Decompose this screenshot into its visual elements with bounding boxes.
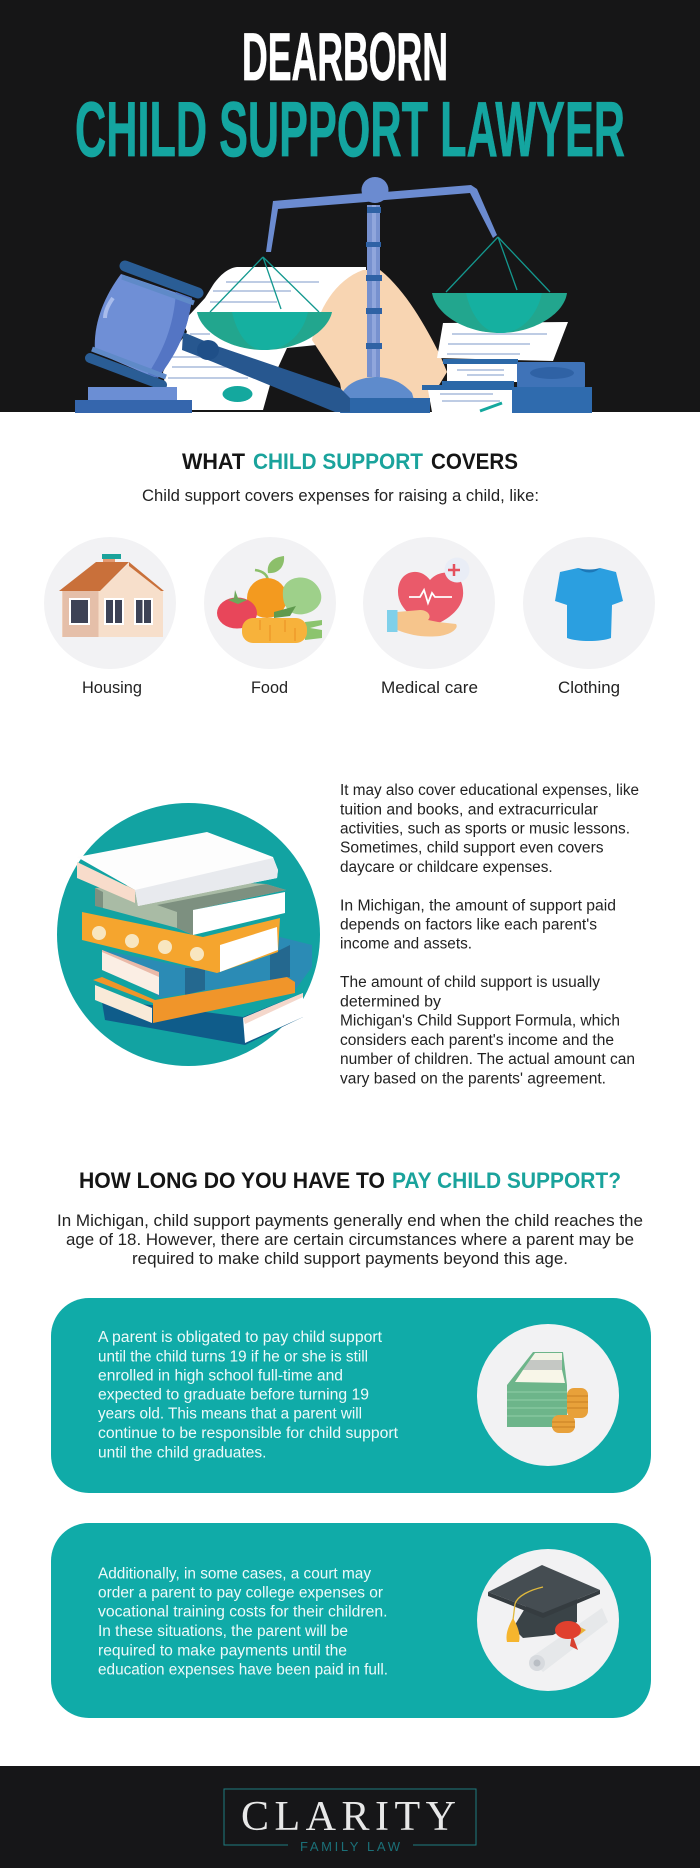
item: clothing: [523, 537, 655, 697]
panel: college card: [51, 1523, 651, 1718]
heading: what child support covers: [182, 449, 518, 474]
bottom navy book: [102, 993, 303, 1045]
label: housing: Housing: [82, 679, 142, 697]
text: college: In these situations, the parent will be: [98, 1623, 348, 1640]
sage book: [95, 880, 286, 935]
orange lying book: [93, 977, 295, 1023]
text: how long intro: [57, 1212, 643, 1268]
heading: how long: HOW LONG DO YOU HAVE TO: [79, 1168, 385, 1193]
text: education paragraph: Sometimes, child support even covers: [340, 840, 604, 857]
panel: header: [0, 0, 700, 413]
text: high school: A parent is obligated to pay child support: [98, 1329, 383, 1346]
text: high school: years old. This means that a parent will: [98, 1406, 362, 1423]
heading: what child support covers: WHAT: [182, 449, 246, 474]
text: high school: expected to graduate before turning 19: [98, 1387, 369, 1404]
text: formula paragraph: determined by: [340, 993, 441, 1010]
text: Michigan paragraph: depends on factors like each parent's: [340, 916, 597, 933]
text: Michigan paragraph: In Michigan, the amount of support paid: [340, 897, 616, 914]
illustration: stack of books: [57, 803, 320, 1066]
text: education paragraph: tuition and books, and extracurricular: [340, 801, 598, 818]
text: Michigan paragraph: income and assets.: [340, 936, 472, 953]
text: college: required to make payments until the: [98, 1642, 347, 1659]
heading: how long: [79, 1168, 621, 1193]
text: formula paragraph: considers each parent's income and the: [340, 1032, 614, 1049]
panel: high school card: [51, 1298, 651, 1493]
text: Michigan paragraph: [340, 897, 616, 953]
top white book: [77, 832, 278, 906]
text: college: [98, 1565, 388, 1678]
text: high school: until the child graduates.: [98, 1444, 266, 1461]
text: high school: enrolled in high school full-time and: [98, 1367, 343, 1384]
title: Dearborn: DEARBORN: [242, 19, 448, 95]
icon: heart in hand: [387, 558, 470, 637]
label: food: Food: [251, 679, 288, 697]
item: housing: [44, 537, 176, 697]
text: how long intro: required to make child support payments beyond this age.: [132, 1250, 568, 1268]
text: how long intro: In Michigan, child support payments generally end when the child reaches the: [57, 1212, 643, 1230]
label: clothing: Clothing: [558, 679, 620, 697]
text: formula paragraph: Michigan's Child Support Formula, which: [340, 1012, 620, 1029]
icon: money and coins: [507, 1352, 588, 1433]
blue book: [102, 937, 312, 998]
panel: footer: [0, 1766, 700, 1868]
label: medical care: Medical care: [381, 679, 478, 697]
text: high school: until the child turns 19 if he or she is still: [98, 1348, 368, 1365]
illustration: scales, gavel and papers: [75, 177, 592, 413]
text: college: order a parent to pay college expenses or: [98, 1585, 383, 1602]
text: education paragraph: It may also cover educational expenses, like: [340, 782, 639, 799]
text: formula paragraph: [340, 974, 635, 1087]
text: college: vocational training costs for their children.: [98, 1604, 388, 1621]
text: education paragraph: activities, such as sports or music lessons.: [340, 820, 630, 837]
icon: vegetables: [217, 556, 322, 643]
text: formula paragraph: The amount of child support is usually: [340, 974, 600, 991]
item: medical care: [363, 537, 495, 697]
text: college: Additionally, in some cases, a court may: [98, 1565, 371, 1582]
item: food: [204, 537, 336, 697]
heading: what child support covers: COVERS: [431, 449, 518, 474]
text: education paragraph: daycare or childcare expenses.: [340, 859, 553, 876]
text: high school: [98, 1329, 399, 1461]
patterned orange book: [82, 912, 280, 973]
heading: how long: PAY CHILD SUPPORT?: [392, 1168, 621, 1193]
text: formula paragraph: vary based on the parents' agreement.: [340, 1070, 606, 1087]
text: intro: Child support covers expenses for raising a child, like:: [142, 487, 539, 505]
icon: house: [59, 554, 164, 637]
logo: Clarity Family Law: FAMILY LAW: [300, 1839, 401, 1854]
heading: what child support covers: CHILD SUPPORT: [253, 449, 424, 474]
icon: graduation cap and diploma: [488, 1565, 608, 1672]
icon: t-shirt: [555, 568, 623, 641]
text: education paragraph: [340, 782, 639, 876]
text: how long intro: age of 18. However, there are certain circumstances where a parent may be: [66, 1231, 634, 1249]
logo: Clarity Family Law: CLARITY: [241, 1794, 456, 1840]
text: high school: continue to be responsible for child support: [98, 1425, 399, 1442]
logo: Clarity Family Law: [224, 1789, 476, 1854]
text: formula paragraph: number of children. The actual amount can: [340, 1051, 635, 1068]
text: college: education expenses have been paid in full.: [98, 1661, 388, 1678]
